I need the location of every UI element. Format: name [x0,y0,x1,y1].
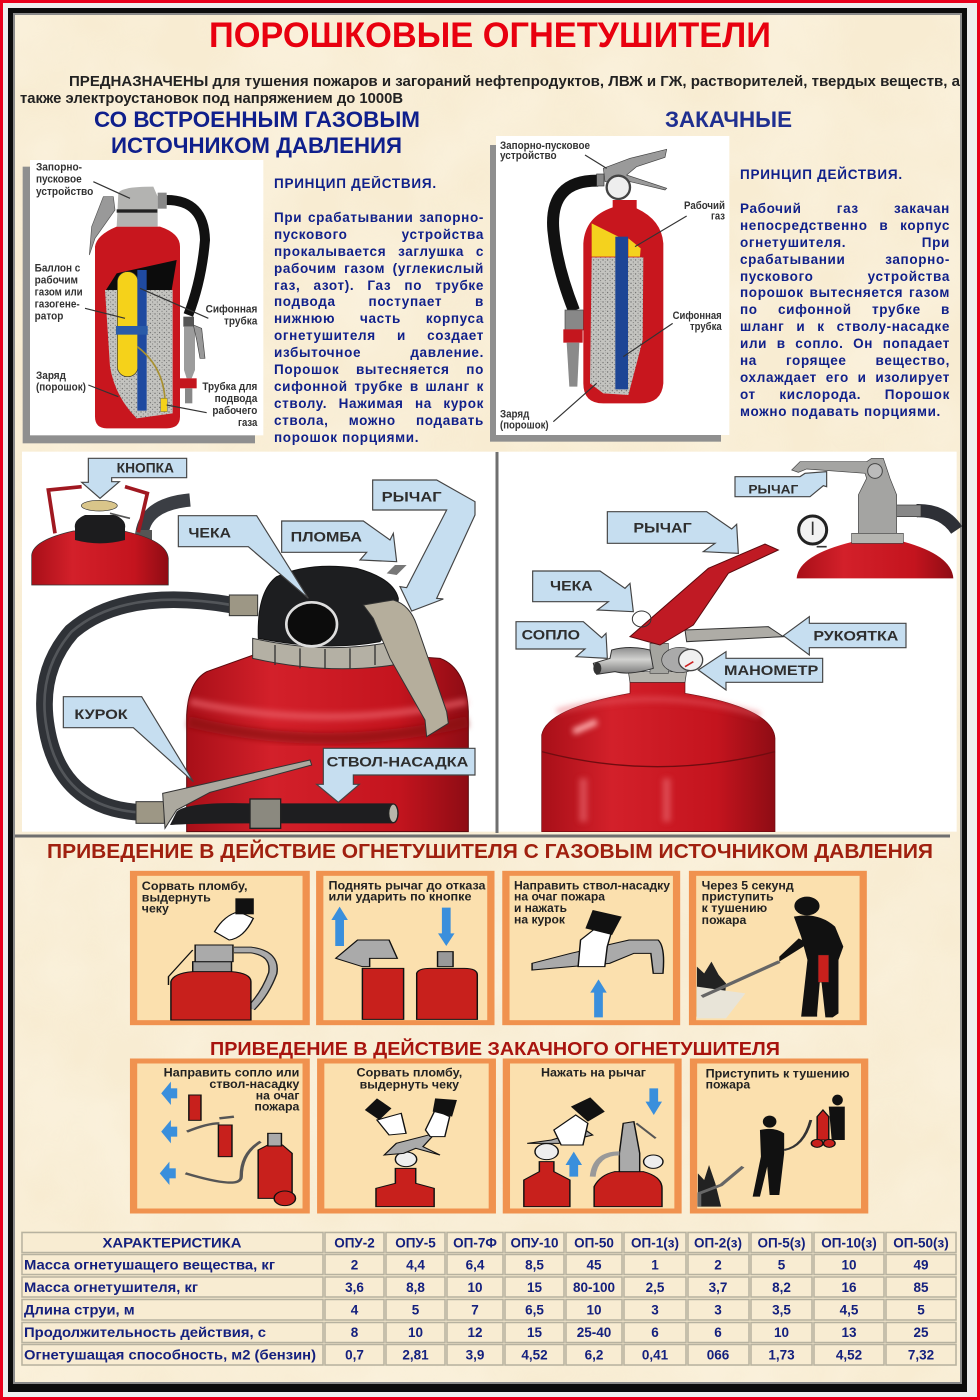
text block: principle of pressurised extinguisher: огнетушителя. При [740,235,950,250]
table header row [102,1236,949,1250]
table row: jet length: 3,5 [772,1302,791,1318]
step panel 1: pull the pin: выдернуть [142,892,211,904]
step panel 8: start extinguishing: Приступить к тушению [706,1068,850,1080]
table row: agent mass: 2 [351,1258,358,1272]
hose fitting [563,310,583,387]
panel: gas cartridge extinguisher head close-up [22,452,497,832]
heading: stored-gas extinguishers: СО ВСТРОЕННЫМ ГАЗОВЫМ [94,107,420,132]
text block: principle of gas cartridge extinguisher: подвода поступает в [274,294,484,309]
callout: gauge [698,652,823,690]
cutaway labels: Заряд [500,409,529,421]
step panel 1: pull the pin: Сорвать пломбу, [142,881,248,893]
inset: cylinder with button [32,487,190,585]
step panel 3: aim nozzle and press trigger [506,873,677,1023]
cutaway labels: Запорно- [36,162,82,174]
table row: extinguisher mass: Масса огнетушителя, кг [24,1280,198,1295]
cutaway labels: рабочего [212,405,258,417]
callout: lever [607,512,738,553]
nozzle [593,647,653,674]
step panel 4: start extinguishing after 5 seconds: пожара [702,915,747,927]
body shading [188,702,467,738]
text block: principle of gas cartridge extinguisher: газ, азот). Газ по трубке [274,278,484,293]
table row: duration: 6 [714,1325,722,1340]
table row: extinguishing capacity: 0,41 [642,1348,669,1362]
cutaway labels: газ [711,210,725,222]
table header row: ОПУ-2 [334,1236,375,1250]
cutaway labels [35,162,258,429]
table row: jet length: 4 [351,1302,359,1318]
table row: duration: 10 [774,1325,789,1340]
cutaway labels: ратор [35,310,64,322]
leader lines [85,182,208,413]
seal [387,565,407,575]
nozzle barrel [170,799,398,828]
step panel 5: aim nozzle: пожара [254,1102,300,1114]
table header row: ОПУ-5 [395,1236,436,1250]
text block: principle of pressurised extinguisher: шланг и к стволу-насадке [740,319,950,334]
cylinder body [187,655,468,832]
step panel 4: start extinguishing after 5 seconds: Через 5 секунд [702,880,794,892]
table row: jet length [24,1302,925,1318]
hose [167,200,205,315]
text block: principle of gas cartridge extinguisher: ствола, можно подавать [274,413,484,428]
table row: agent mass: 45 [586,1258,602,1272]
callout: nozzle: СОПЛО [522,627,580,643]
text block: principle of pressurised extinguisher: Рабочий газ закачан [740,201,950,216]
callout: nozzle [516,622,607,658]
table row: duration: 8 [351,1325,359,1340]
text block: principle of gas cartridge extinguisher: избыточное давление. [274,345,484,360]
table row: jet length: 3 [651,1302,659,1318]
callout: handle [783,617,906,655]
cutaway labels: газом или [35,286,83,298]
text block: principle of pressurised extinguisher: непосредственно в корпус [740,218,950,233]
text block: principle of pressurised extinguisher: порошок вытесняется газом [740,285,950,300]
callout: trigger: КУРОК [74,706,128,722]
table row: extinguishing capacity [24,1348,934,1362]
step panel 5: aim nozzle: ствол-насадку [209,1079,300,1091]
cutaway labels [500,140,725,431]
table row: extinguisher mass: 8,2 [772,1280,791,1295]
text block: principle of gas cartridge extinguisher: Порошок вытесняется по [274,362,484,377]
title: ПОРОШКОВЫЕ ОГНЕТУШИТЕЛИ [209,16,771,55]
gauge [662,647,703,673]
step panel 3: aim nozzle and press trigger: на курок [514,914,565,926]
text block: principle of gas cartridge extinguisher: При срабатывании запорно- [274,210,484,225]
inner cutaway [590,223,643,395]
table row: duration: 25 [913,1325,929,1340]
black cap [258,566,398,646]
cutaway labels: подвода [215,393,258,405]
text block: principle of gas cartridge extinguisher: ПРИНЦИП ДЕЙСТВИЯ. [274,176,437,191]
panel: cutaway of pressurised extinguisher [490,136,729,442]
table row: agent mass: 1 [651,1258,659,1272]
cutaway labels: газогене- [35,298,80,310]
cutaway labels: пусковое [36,174,82,186]
text block: principle of gas cartridge extinguisher: порошок порциями. [274,430,419,445]
table row: extinguishing capacity: 3,9 [466,1348,484,1362]
panel: cutaway of gas cartridge extinguisher [23,160,263,443]
valve body and collar [628,643,687,682]
table row: extinguisher mass: 8,8 [406,1280,425,1295]
table row: jet length: 5 [412,1302,420,1318]
cutaway labels: рабочим [35,274,78,286]
step panel 8: start extinguishing: пожара [706,1080,751,1092]
text block: principle of gas cartridge extinguisher [274,176,484,445]
table header row: ОП-7Ф [453,1236,497,1250]
table row: agent mass: Масса огнетушащего вещества, кг [24,1258,275,1272]
characteristics table [21,1231,957,1366]
table row: extinguisher mass: 80-100 [573,1280,615,1295]
intro text: также электроустановок под напряжением до 1000В [20,91,403,107]
heading: pressurised extinguishers: ЗАКАЧНЫЕ [665,107,792,132]
cutaway labels: Трубка для [202,381,257,393]
table row: extinguisher mass [24,1280,929,1295]
table row: extinguishing capacity: 1,73 [768,1348,795,1362]
step panel 7: press lever [506,1061,678,1211]
table row: jet length: 6,5 [525,1302,544,1318]
handle [685,627,783,642]
step panel 3: aim nozzle and press trigger: и нажать [514,903,567,915]
table header row: ОП-10(з) [821,1236,877,1250]
table row: extinguisher mass: 15 [527,1280,542,1295]
callout: nozzle: СТВОЛ-НАСАДКА [327,753,468,769]
step panel 6: pull the pin: Сорвать пломбу, [356,1068,462,1080]
inner cutaway [105,260,177,418]
step panel 1: pull the pin: чеку [142,904,169,916]
callout: gauge: МАНОМЕТР [724,662,818,678]
leader lines [553,155,687,422]
table row: agent mass: 2 [714,1258,722,1272]
nozzle [180,317,205,403]
text block: principle of pressurised extinguisher: пускового устройства [740,269,950,284]
table row: extinguisher mass: 10 [467,1280,483,1295]
step panel 1: pull the pin [134,873,306,1023]
table row: duration: 6 [651,1325,659,1340]
step panel 2: raise lever or press button: Поднять рычаг до отказа [328,880,486,892]
text block: principle of gas cartridge extinguisher: огнетушителя и создает [274,328,484,343]
table header row: ОП-1(з) [631,1236,679,1250]
panel: pressurised extinguisher head close-up [498,452,957,832]
callout: handle: РУКОЯТКА [813,627,898,643]
table row: duration: 15 [527,1325,542,1340]
table row: agent mass: 10 [841,1258,857,1272]
text block: principle of pressurised extinguisher: срабатывании запорно- [740,252,950,267]
text block: principle of pressurised extinguisher: ПРИНЦИП ДЕЙСТВИЯ. [740,167,903,182]
table cell grid [22,1232,956,1365]
table row: agent mass: 8,5 [525,1258,544,1272]
table row: extinguisher mass: 3,7 [709,1280,727,1295]
text block: principle of gas cartridge extinguisher: пускового устройства [274,227,484,242]
table row: jet length: 7 [471,1302,479,1318]
table row: agent mass: 6,4 [466,1258,485,1272]
step panel 4: start extinguishing after 5 seconds: приступить [702,892,774,904]
table row: extinguisher mass: 85 [913,1280,929,1295]
cutaway labels: трубка [224,316,258,328]
panel dividers [15,452,950,836]
cutaway labels: (порошок) [36,382,86,394]
callout: seal [282,521,397,562]
text block: principle of pressurised extinguisher: или в сопло. Он попадает [740,336,950,351]
text block: principle of pressurised extinguisher: охлаждает его и изолирует [740,370,950,385]
table row: extinguishing capacity: 0,7 [345,1348,364,1362]
section heading: pressurised operation: ПРИВЕДЕНИЕ В ДЕЙСТВИЕ ЗАКАЧНОГО ОГНЕТУШИТЕЛЯ [210,1038,780,1059]
intro text [20,74,961,107]
section heading: gas source operation: ПРИВЕДЕНИЕ В ДЕЙСТВИЕ ОГНЕТУШИТЕЛЯ С ГАЗОВЫМ ИСТОЧНИКОМ ДАВЛЕНИЯ [47,839,933,863]
step panel 3: aim nozzle and press trigger: Направить ствол-насадку [514,880,671,892]
table row: extinguishing capacity: 2,81 [402,1348,429,1362]
table row: duration: 25-40 [577,1325,611,1340]
callout: pin: ЧЕКА [550,578,593,594]
table row: jet length: 5 [917,1302,925,1318]
table header row: ОП-2(з) [694,1236,742,1250]
callout: lever [373,480,475,611]
cutaway labels: Заряд [36,370,66,382]
intro text: ПРЕДНАЗНАЧЕНЫ для тушения пожаров и загораний нефтепродуктов, ЛВЖ и ГЖ, растворителей, твердых веществ, а [69,74,961,90]
callout: lever: РЫЧАГ [633,519,692,535]
text block: principle of pressurised extinguisher: от кислорода. Порошок [740,387,950,402]
text block: principle of gas cartridge extinguisher: рабочим газом (углекислый [274,261,484,276]
table header row: ОП-50(з) [893,1236,949,1250]
callout: lever: РЫЧАГ [382,489,442,505]
cutaway labels: трубка [690,321,722,333]
table row: extinguisher mass: 3,6 [345,1280,364,1295]
cutaway labels: Сифонная [673,310,722,322]
callout: trigger [63,697,193,782]
table row: agent mass: 5 [778,1258,786,1272]
step panel 6: pull the pin [321,1061,492,1211]
callout: button [82,458,187,498]
table row: jet length: 4,5 [840,1302,859,1318]
hose [44,600,232,812]
table row: duration: 12 [467,1325,483,1340]
table row: duration: Продолжительность действия, с [24,1325,267,1340]
heading: stored-gas extinguishers [94,107,420,158]
table header row: ОП-50 [574,1236,614,1250]
step panel 7: press lever: Нажать на рычаг [541,1068,646,1080]
lever [363,600,448,737]
table row: duration: 10 [408,1325,423,1340]
text block: principle of pressurised extinguisher [740,166,950,419]
inset: head with lever [792,458,957,578]
step panel 4: start extinguishing after 5 seconds: к тушению [702,903,767,915]
table row: duration: 13 [841,1325,857,1340]
step panel 4: start extinguishing after 5 seconds [693,873,863,1023]
text block: principle of gas cartridge extinguisher: нижнюю часть корпуса [274,311,484,326]
collar [253,638,393,669]
hose ferrules [136,595,258,823]
step panel 8: start extinguishing [694,1061,865,1211]
body line and shading [542,699,775,822]
safety pin ring [286,602,337,646]
table row: extinguisher mass: 2,5 [646,1280,665,1295]
table row: extinguishing capacity: 7,32 [908,1348,934,1362]
table row: jet length: Длина струи, м [24,1302,135,1318]
hose [553,181,598,311]
text block: principle of gas cartridge extinguisher: стволу. Нажимая на курок [274,396,484,411]
trigger [163,760,312,828]
lever [630,544,778,645]
text block: principle of pressurised extinguisher: на горящее вещество, [740,353,950,368]
table row: jet length: 10 [586,1302,602,1318]
pin loop [632,611,651,627]
callout: small lever: РЫЧАГ [748,482,799,496]
callout: seal: ПЛОМБА [291,529,362,545]
table row: extinguishing capacity: Огнетушащая способность, м2 (бензин) [24,1348,316,1362]
table row: duration [24,1325,929,1340]
step panel 6: pull the pin: выдернуть чеку [360,1079,460,1091]
step panel 5: aim nozzle: на очаг [256,1090,300,1102]
step panel 5: aim nozzle: Направить сопло или [164,1068,299,1080]
text block: principle of gas cartridge extinguisher: прокалывается заглушка с [274,244,484,259]
cutaway labels: Запорно-пусковое [500,140,590,152]
table row: extinguishing capacity: 4,52 [836,1348,862,1362]
step panel 2: raise lever or press button [320,873,491,1023]
table row: agent mass: 4,4 [406,1258,425,1272]
text block: principle of pressurised extinguisher: по сифонной трубке в [740,302,950,317]
table row: extinguishing capacity: 6,2 [585,1348,603,1362]
callout: nozzle [317,748,475,802]
table row: jet length: 3 [714,1302,722,1318]
callout: pin [178,516,308,598]
table row: extinguishing capacity: 4,52 [521,1348,548,1362]
table row: agent mass [24,1258,929,1272]
callout: pin [533,571,633,612]
cutaway labels: устройство [36,186,94,198]
callout: button: КНОПКА [117,459,174,475]
callout: pin: ЧЕКА [188,524,231,540]
heading: stored-gas extinguishers: ИСТОЧНИКОМ ДАВЛЕНИЯ [111,133,402,158]
text block: principle of gas cartridge extinguisher: сифонной трубке в шланг к [274,379,484,394]
table header row: ОПУ-10 [510,1236,559,1250]
callout: small lever [735,472,827,497]
cutaway labels: Рабочий [684,200,725,212]
table header row: ХАРАКТЕРИСТИКА [102,1236,242,1250]
step panel 3: aim nozzle and press trigger: на очаг пожара [514,892,606,904]
cutaway labels: устройство [500,150,557,162]
cutaway labels: (порошок) [500,419,549,431]
table row: extinguishing capacity: 066 [707,1348,730,1362]
table row: extinguisher mass: 16 [841,1280,857,1295]
cylinder body [95,227,180,428]
head and lever [597,149,667,199]
table row: agent mass: 49 [913,1258,929,1272]
cutaway labels: газа [238,417,258,429]
text block: principle of pressurised extinguisher: можно подавать порциями. [740,404,941,419]
cutaway labels: Сифонная [206,304,257,316]
shut-off head [89,187,167,255]
step panel 2: raise lever or press button: или ударить по кнопке [328,892,472,904]
table header row: ОП-5(з) [758,1236,805,1250]
cylinder body [583,200,663,403]
cylinder body [542,678,775,832]
step panel 5: aim nozzle [134,1061,306,1211]
cutaway labels: Баллон с [35,263,80,275]
